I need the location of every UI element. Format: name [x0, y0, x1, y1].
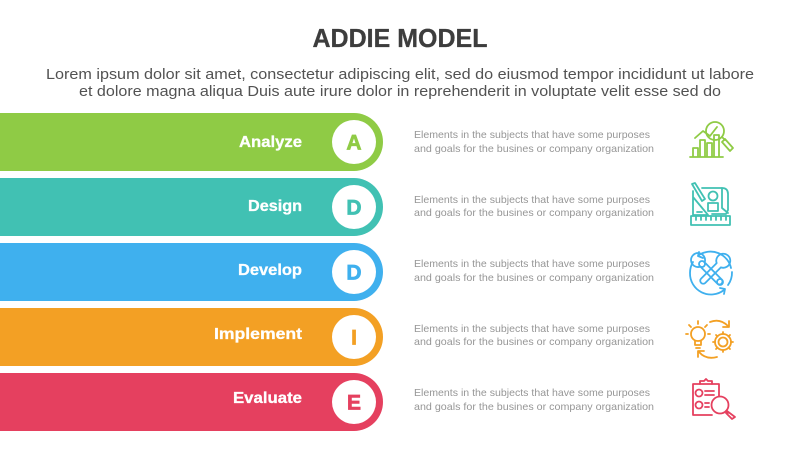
- label: evaluate: Evaluate: [233, 390, 302, 407]
- panel: design bar: [0, 178, 383, 236]
- text block: analyze description: Elements in the subjects that have some purposes: [414, 129, 650, 141]
- text block: analyze description: [414, 129, 654, 155]
- intro text: et dolore magna aliqua Duis aute irure dolor in reprehenderit in voluptate velit esse sed do: [79, 83, 721, 100]
- text block: evaluate description: [414, 387, 654, 413]
- text block: design description: Elements in the subjects that have some purposes: [414, 194, 650, 206]
- text block: evaluate description: and goals for the busines or company organization: [414, 401, 654, 413]
- label: analyze: Analyze: [239, 134, 302, 151]
- letter E: E: [347, 392, 361, 414]
- text block: evaluate description: Elements in the subjects that have some purposes: [414, 387, 650, 399]
- text block: develop description: [414, 258, 654, 284]
- label: design: Design: [248, 198, 302, 215]
- text block: design description: and goals for the busines or company organization: [414, 207, 654, 219]
- panel: analyze bar: [0, 113, 383, 171]
- text block: develop description: and goals for the busines or company organization: [414, 272, 654, 284]
- icon: blueprint and ruler: [691, 183, 730, 225]
- letter D: D: [346, 262, 362, 284]
- title: ADDIE MODEL: [312, 23, 488, 53]
- label: develop: Develop: [238, 262, 302, 279]
- letter I: I: [351, 326, 357, 350]
- intro text: Lorem ipsum dolor sit amet, consectetur adipiscing elit, sed do eiusmod tempor incididunt ut labore: [46, 66, 754, 83]
- letter D: D: [346, 196, 362, 220]
- text block: implement description: and goals for the busines or company organization: [414, 336, 654, 348]
- panel: evaluate bar: [0, 373, 383, 431]
- panel: develop bar: [0, 243, 383, 301]
- intro text: [46, 66, 754, 100]
- icon: tools in rotating arrows: [688, 250, 733, 295]
- icon: clipboard and magnifier: [693, 379, 735, 419]
- panel: implement bar: [0, 308, 383, 366]
- text block: analyze description: and goals for the busines or company organization: [414, 143, 654, 155]
- letter A: A: [346, 132, 362, 154]
- label: implement: Implement: [214, 326, 302, 343]
- text block: develop description: Elements in the subjects that have some purposes: [414, 258, 650, 270]
- text block: implement description: [414, 323, 654, 348]
- icon: light bulb, gear and cycle arrows: [686, 321, 733, 358]
- icon: analysis chart with magnifier: [690, 122, 733, 157]
- text block: design description: [414, 194, 654, 219]
- text block: implement description: Elements in the subjects that have some purposes: [414, 323, 650, 335]
